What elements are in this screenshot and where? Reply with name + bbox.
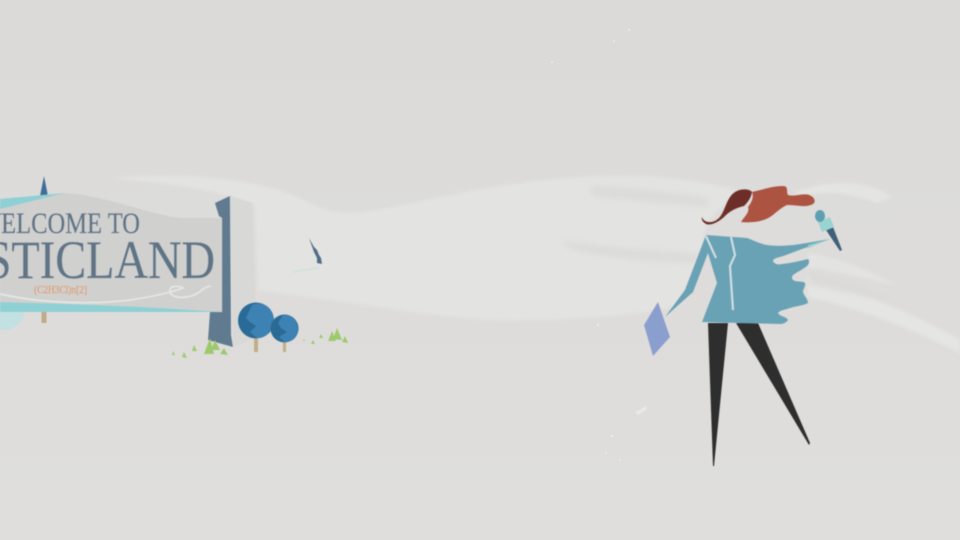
ripple bbox=[293, 268, 319, 272]
reporter figure bbox=[644, 186, 842, 466]
icon: spire behind sign bbox=[40, 176, 48, 196]
wind swaths bbox=[110, 176, 960, 353]
right leg bbox=[736, 323, 810, 445]
debris specks bbox=[551, 29, 647, 461]
hair red bbox=[741, 186, 815, 222]
mic handle bbox=[826, 227, 842, 251]
microphone bbox=[815, 210, 842, 251]
sign support leg bbox=[42, 310, 46, 323]
grass tufts bbox=[172, 328, 348, 358]
coat seams bbox=[706, 236, 735, 310]
mic collar bbox=[818, 217, 834, 232]
post shadow face bbox=[230, 196, 257, 347]
sign face bbox=[0, 193, 222, 312]
trees bbox=[238, 302, 298, 352]
coat bbox=[665, 235, 830, 324]
darker wind streaks bbox=[562, 186, 900, 302]
welcome sign bbox=[0, 176, 257, 347]
pale teal shape under sign bbox=[0, 312, 24, 330]
sleeve highlight bbox=[808, 239, 830, 248]
sign teal bands bbox=[0, 193, 222, 312]
left leg bbox=[708, 323, 728, 466]
icon: distant swimmer bbox=[293, 238, 322, 272]
chemical formula: (C2H3Cl)n[2] bbox=[34, 285, 87, 296]
small tree bbox=[270, 314, 298, 342]
post front face bbox=[208, 196, 233, 347]
white squiggle bbox=[0, 286, 211, 303]
tree trunks bbox=[254, 336, 286, 352]
large tree bbox=[238, 302, 274, 338]
clipboard bbox=[644, 302, 670, 356]
hair dark bbox=[702, 189, 752, 224]
mic head bbox=[815, 210, 825, 222]
